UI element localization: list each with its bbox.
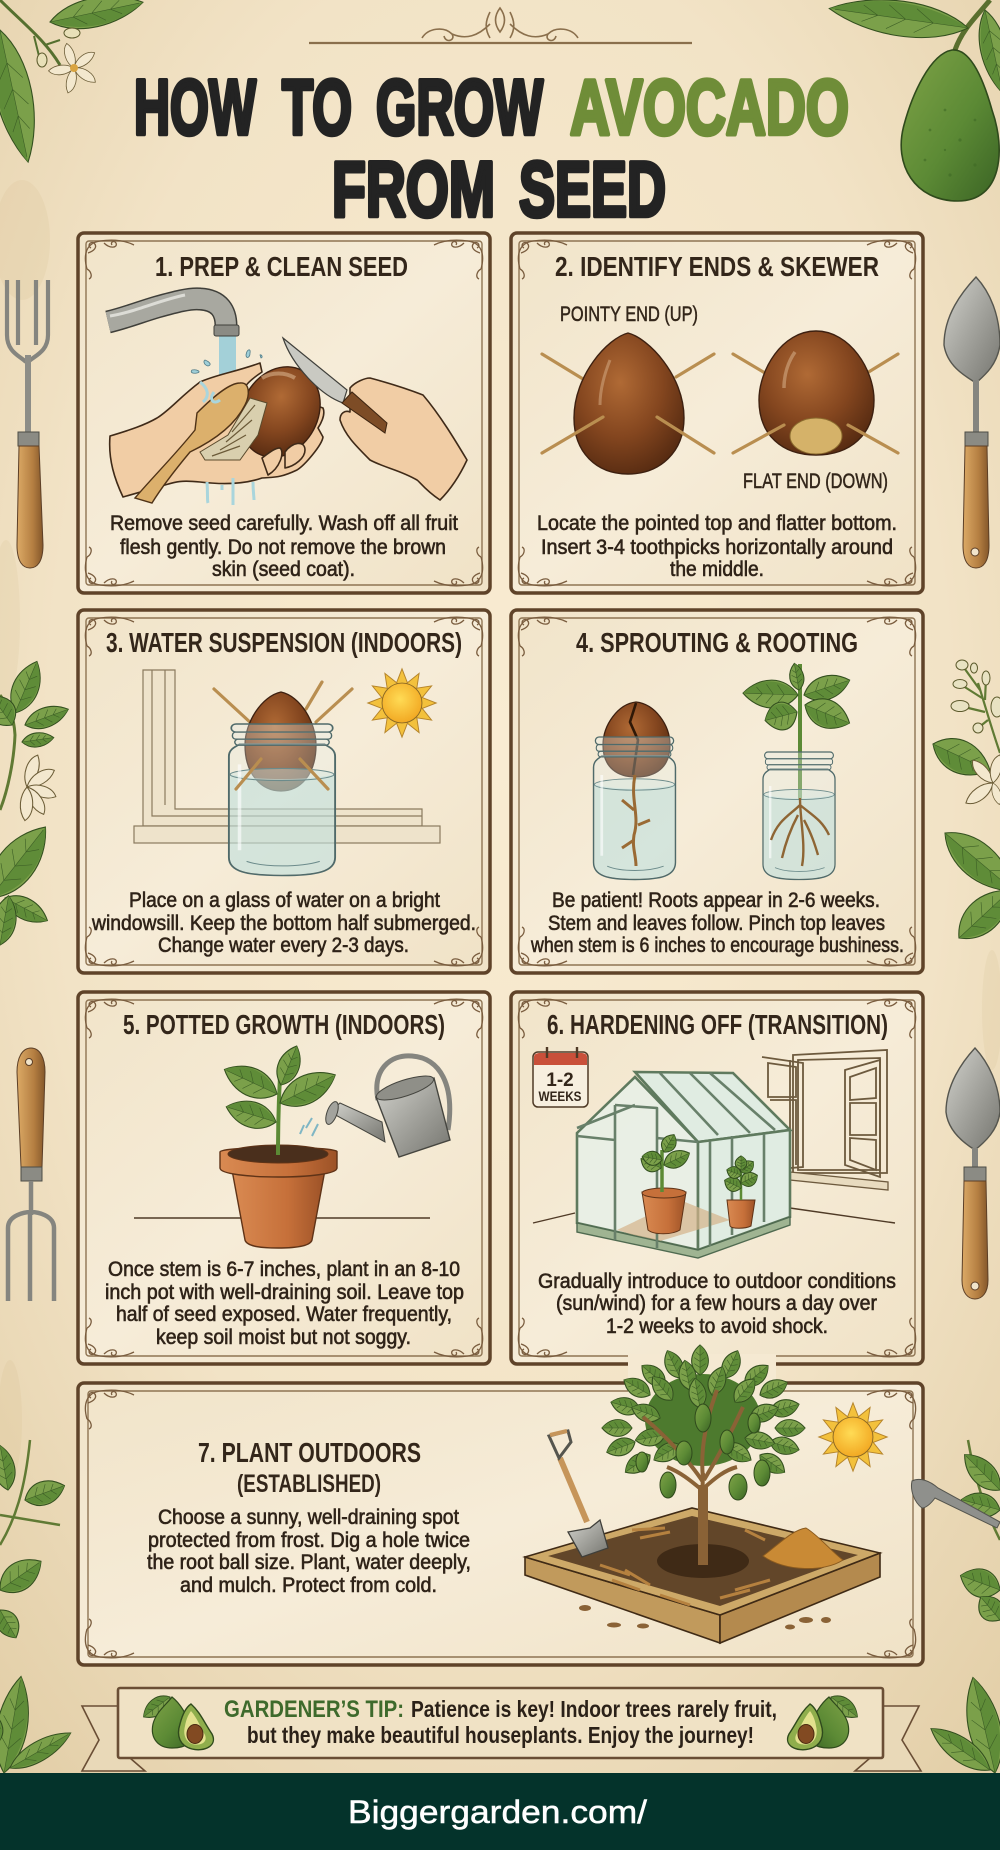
illustration: seed in jar (214, 682, 352, 876)
icon: avocados left (139, 1690, 213, 1750)
label: pointy end: POINTY END (UP) (560, 303, 698, 326)
decoration: bottom left leaves (0, 1674, 76, 1776)
body text 3: Place on a glass of water on a bright (129, 889, 440, 912)
heading 4: 4. SPROUTING & ROOTING (576, 627, 858, 658)
body text 2: Locate the pointed top and flatter bottom. (537, 512, 897, 535)
panel 4: sprouting and rooting (511, 610, 923, 973)
body text 6: (sun/wind) for a few hours a day over (556, 1292, 877, 1315)
illustration: avocado tree (602, 1345, 805, 1565)
body text 5: keep soil moist but not soggy. (156, 1326, 411, 1349)
tip text: GARDENER’S TIP: (224, 1696, 404, 1723)
icon: avocado (901, 50, 999, 201)
decoration: top left botanical branch (0, 0, 146, 166)
body text 1: skin (seed coat). (212, 558, 355, 581)
panel 6: hardening off (511, 992, 923, 1364)
footer url: Biggergarden.com/ (348, 1794, 647, 1830)
title: SEED (519, 145, 666, 233)
decoration: left middle branch (0, 656, 72, 947)
panel 3: water suspension (78, 610, 490, 973)
panel 1: prep and clean seed (78, 233, 490, 593)
heading 1: 1. PREP & CLEAN SEED (155, 251, 408, 282)
body text 4: Stem and leaves follow. Pinch top leaves (548, 912, 885, 935)
heading 7: (ESTABLISHED) (237, 1470, 381, 1498)
title: AVOCADO (570, 63, 849, 151)
tip text: but they make beautiful houseplants. Enjoy the journey! (247, 1722, 754, 1748)
illustration: greenhouse (577, 1072, 790, 1258)
body text 5 (105, 1258, 464, 1349)
icon: sun (819, 1403, 887, 1471)
illustration: pointy seed with toothpicks (542, 333, 714, 474)
heading 7: 7. PLANT OUTDOORS (198, 1437, 421, 1468)
body text 5: Once stem is 6-7 inches, plant in an 8-10 (108, 1258, 460, 1281)
icon: small trowel (911, 1479, 1000, 1528)
icon: calendar: WEEKS (538, 1088, 582, 1104)
heading 2: 2. IDENTIFY ENDS & SKEWER (555, 251, 879, 282)
heading 6: 6. HARDENING OFF (TRANSITION) (547, 1009, 888, 1040)
heading 3: 3. WATER SUSPENSION (INDOORS) (106, 627, 462, 658)
icon: garden fork lower left (8, 1048, 54, 1301)
decoration: bottom right leaves (924, 1674, 1000, 1780)
body text 2: Insert 3-4 toothpicks horizontally around (541, 536, 893, 559)
illustration: floor lines (533, 1208, 895, 1223)
decoration: top ornament (309, 8, 692, 43)
icon: garden fork upper left (7, 280, 48, 568)
icon: trowel lower right (946, 1048, 1000, 1299)
panel 2: identify ends and skewer (511, 233, 923, 593)
title: FROM (332, 145, 495, 233)
body text 1: Remove seed carefully. Wash off all fruit (110, 512, 458, 535)
decoration: right middle branch (926, 660, 1000, 950)
title: TO (282, 63, 352, 151)
icon: trowel upper right (944, 277, 1000, 568)
icon: calendar (533, 1047, 588, 1107)
body text 2 (537, 512, 897, 581)
illustration: hands washing seed (110, 338, 467, 505)
title: GROW (376, 63, 543, 151)
body text 4: Be patient! Roots appear in 2-6 weeks. (552, 889, 880, 912)
heading 5: 5. POTTED GROWTH (INDOORS) (123, 1009, 445, 1040)
body text 7: and mulch. Protect from cold. (180, 1574, 437, 1597)
decoration: top right avocado and leaves (827, 0, 1000, 201)
body text 6: Gradually introduce to outdoor conditions (538, 1270, 896, 1293)
body text 7: Choose a sunny, well-draining spot (158, 1506, 459, 1529)
icon: shovel (549, 1431, 608, 1557)
panel 5: potted growth (78, 992, 490, 1364)
label: flat end: FLAT END (DOWN) (743, 470, 888, 493)
body text 7 (147, 1506, 471, 1597)
body text 5: inch pot with well-draining soil. Leave top (105, 1281, 464, 1304)
decoration: right lower branch (911, 1440, 1000, 1627)
icon: avocados right (788, 1690, 862, 1750)
body text 7: protected from frost. Dig a hole twice (148, 1529, 470, 1552)
body text 3 (91, 889, 476, 957)
body text 4: when stem is 6 inches to encourage bushiness. (530, 934, 904, 957)
illustration: flat seed with toothpicks (733, 331, 898, 455)
heading 7 (198, 1437, 421, 1498)
body text 4 (530, 889, 904, 957)
illustration: cracked seed in jar (594, 702, 675, 880)
icon: watering can (300, 1056, 450, 1157)
banner: gardener's tip (82, 1688, 921, 1771)
panel 7: plant outdoors (78, 1345, 923, 1665)
decoration: left lower branch (0, 1440, 68, 1643)
body text 3: Change water every 2-3 days. (158, 934, 409, 957)
body text 2: the middle. (670, 558, 764, 581)
title (134, 63, 849, 233)
body text 7: the root ball size. Plant, water deeply, (147, 1551, 471, 1574)
body text 1: flesh gently. Do not remove the brown (120, 536, 446, 559)
footer bar (0, 1773, 1000, 1850)
illustration: open window (762, 1050, 888, 1190)
decorative stains (0, 180, 1000, 1480)
body text 6 (538, 1270, 896, 1338)
body text 6: 1-2 weeks to avoid shock. (606, 1315, 828, 1338)
illustration: sprout with roots in jar (743, 662, 855, 880)
illustration: window frame (134, 670, 440, 843)
body text 5: half of seed exposed. Water frequently, (116, 1303, 452, 1326)
icon: calendar: 1-2 (546, 1070, 574, 1091)
body text 3: windowsill. Keep the bottom half submerged. (91, 912, 476, 935)
illustration: table line (134, 1217, 430, 1219)
icon: faucet (108, 295, 262, 390)
tip text: Patience is key! Indoor trees rarely fruit, (411, 1696, 777, 1722)
tip text (224, 1696, 777, 1748)
icon: sun (368, 669, 436, 737)
illustration: seedling in terracotta pot (219, 1042, 342, 1248)
body text 1 (110, 512, 458, 581)
illustration: raised garden bed (525, 1508, 880, 1643)
title: HOW (134, 63, 256, 151)
